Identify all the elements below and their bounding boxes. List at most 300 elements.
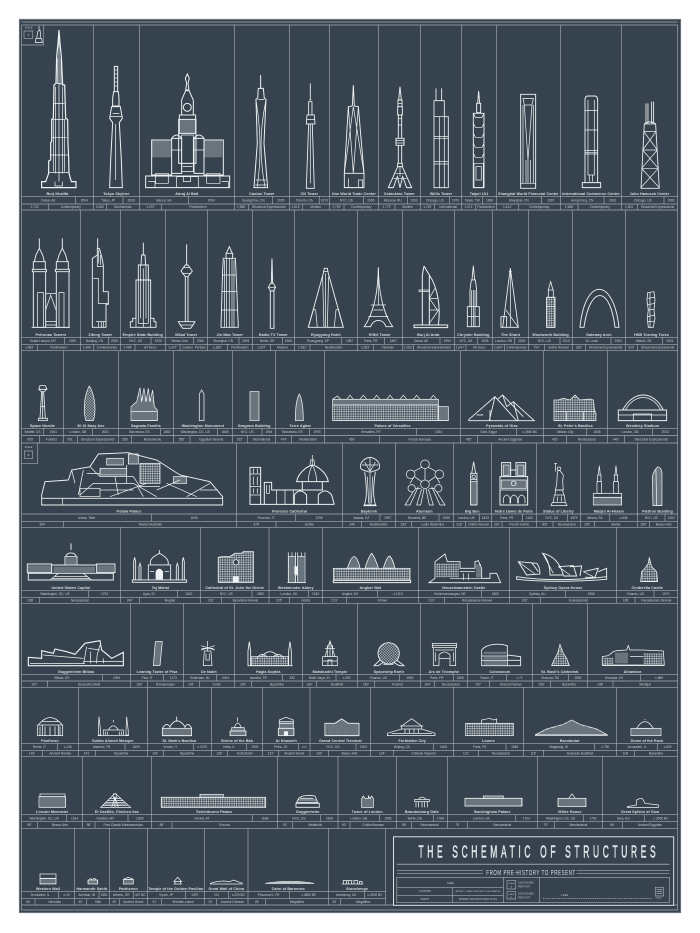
- structure: Temple of the Golden Pavilion: 1397: [191, 893, 199, 897]
- structure: Guggenheim Bilbao: 1993: [113, 676, 120, 680]
- structure: Milad Tower: Contem. Persian: [182, 346, 206, 350]
- structure: Great Sphinx of Giza: Giza, EG: [617, 816, 630, 820]
- structure: Petronas Towers: 1,483': [25, 346, 34, 350]
- icon: Parthenon: [123, 877, 133, 884]
- structure: Angkor Wat: Khmer: [378, 598, 388, 602]
- structure: El Castillo, Chichen Itza: Yucatan, MX: [96, 816, 115, 820]
- structure: Spaceship Earth: 180': [363, 682, 369, 686]
- structure: Eiffel Tower: 1887: [390, 339, 397, 343]
- structure: Brandenburg Gate: Neoclassical: [421, 823, 439, 827]
- structure: Chrysler Building: Chrysler Building: [457, 333, 490, 337]
- structure: Brandenburg Gate: 85': [402, 823, 406, 827]
- icon: Chrysler Building: [467, 266, 479, 327]
- structure: Westminster Abbey: 1245: [312, 592, 319, 596]
- structure: Big Ben: 316': [457, 522, 463, 526]
- structure: White House: Washington, DC, US: [546, 816, 575, 820]
- structure: White House: Neoclassical: [569, 823, 588, 827]
- structure: Buckingham Palace: 79': [455, 823, 460, 827]
- structure: Masjid Al-Haram: Masjid Al-Haram: [594, 510, 624, 514]
- structure: El Castillo, Chichen Itza: [87, 793, 144, 827]
- structure: Gateway Arch: Gateway Arch: [586, 333, 612, 337]
- structure: Grand Central Terminal: [316, 719, 367, 756]
- icon: Taipei 101: [473, 91, 484, 188]
- structure: Arc de Triomphe: Arc de Triomphe: [429, 670, 459, 674]
- structure: Parthenon: Ancient Greek: [123, 900, 144, 904]
- structure: St. Basil's Cathedral: [539, 644, 582, 686]
- structure: Borobudur: [530, 720, 609, 756]
- structure: Radio TV Tower: 1965: [285, 339, 292, 343]
- structure: Notre Dame de Paris: French Gothic: [509, 522, 530, 526]
- structure: Potala Palace: Potala Palace: [117, 510, 141, 514]
- icon: Alhambra: [602, 646, 664, 666]
- structure: Alhambra: Alhambra: [624, 670, 642, 674]
- structure: Florence Cathedral: Florence Cathedral: [272, 510, 307, 514]
- icon: Big Ben: [471, 462, 477, 505]
- structure: Arc de Triomphe: [424, 643, 464, 686]
- icon: Louvre: [466, 718, 513, 736]
- structure: Abraj Al Bait: [146, 74, 230, 209]
- structure: Guggenheim: NYC, US: [293, 816, 305, 820]
- structure: Buckingham Palace: [455, 796, 530, 827]
- icon: Guggenheim: [296, 795, 319, 807]
- structure: International Commerce Centre: Hong Kong, CN: [571, 198, 594, 202]
- structure: Zifeng Tower: 1,480': [83, 346, 92, 350]
- icon: Mahabodhi Temple: [323, 641, 337, 666]
- structure: Temple of the Golden Pavilion: Kyoto, JP: [159, 893, 173, 897]
- legend: SCALE: [508, 893, 515, 896]
- structure: Sultan Ahmed Mosque: 141': [84, 752, 90, 756]
- row 3: [24, 386, 669, 441]
- icon: Al Khazneh: [278, 717, 294, 736]
- structure: Tower of London: Gothic/Norman: [362, 823, 384, 827]
- structure: Dome of the Rock: Jerusalem, IL: [627, 745, 647, 749]
- structure: Colosseum: c.72: [516, 676, 523, 680]
- structure: Temple of the Golden Pavilion: Shinden-zukuri: [172, 900, 194, 904]
- structure: Atomium: Ludic Modernist: [421, 522, 444, 526]
- structure: Woolworth Building: [532, 282, 570, 350]
- structure: Shanghai World Financial Center: [498, 94, 559, 209]
- structure: Lincoln Memorial: 1914: [71, 816, 78, 820]
- structure: International Commerce Centre: 2002: [609, 198, 616, 202]
- structure: Flatiron Building: NYC, US: [645, 516, 658, 520]
- structure: Shrine of the Báb: [216, 717, 258, 756]
- structure: Chrysler Building: 1928: [481, 339, 489, 343]
- structure: El Castillo, Chichen Itza: 98': [87, 823, 91, 827]
- structure: St. Peter's Basilica: Vatican City: [557, 430, 574, 434]
- icon: Temple of the Golden Pavilion: [174, 877, 182, 884]
- structure: Burj Khalifa: 2,722': [31, 205, 40, 209]
- icon: Neuschwanstein Castle: [429, 554, 501, 583]
- structure: Louvre: Louvre: [482, 739, 495, 743]
- structure: Chrysler Building: Art Deco: [473, 346, 486, 350]
- structure: Torre Agbar: 1999: [313, 430, 321, 434]
- structure: Zifeng Tower: [83, 238, 118, 350]
- structure: St. Peter's Basilica: 452': [552, 437, 558, 441]
- structure: Westminster Abbey: 225': [276, 598, 283, 602]
- structure: Great Wall of China: Ancient Chinese: [221, 900, 244, 904]
- structure: One World Trade Center: One World Trade Center: [332, 192, 376, 196]
- structure: Parthenon: Athens, GR: [113, 893, 130, 897]
- structure: Washington Monument: [179, 390, 229, 441]
- structure: Mahabodhi Temple: Buddhist: [331, 682, 343, 686]
- structure: Neuschwanstein Castle: 213': [429, 598, 435, 602]
- icon: St. Peter's Basilica: [554, 395, 596, 421]
- structure: Borobudur: Magelang, ID: [549, 745, 569, 749]
- structure: Grand Central Terminal: Beaux-Arts: [342, 752, 358, 756]
- structure: Western Wall: [26, 874, 70, 904]
- structure: Radio TV Tower: Modern: [277, 346, 288, 350]
- structure: Forbidden City: Forbidden City: [399, 739, 427, 743]
- structure: Cinderella Castle: Renaissance Revival: [641, 598, 671, 602]
- structure: Masjid Al-Haram: 292': [584, 522, 591, 526]
- icon: Schönbrunn Palace: [161, 794, 266, 807]
- structure: Mahabodhi Temple: [307, 641, 351, 686]
- structure: Eiffel Tower: Paris, FR: [364, 339, 378, 343]
- structure: Radio TV Tower: Berlin, DE: [260, 339, 274, 343]
- structure: The Shard: The Shard: [501, 333, 521, 337]
- structure: United States Capitol: Washington, DC, US: [40, 592, 70, 596]
- structure: Statue of Liberty: 1875: [570, 516, 578, 520]
- structure: Hagia Sophia: 180': [240, 682, 246, 686]
- structure: Ryugyong Hotel: Neofuturistic: [325, 346, 343, 350]
- row 2: [25, 238, 674, 350]
- structure: Atomium: Atomium: [416, 510, 433, 514]
- icon: Tokyo Skytree: [110, 66, 122, 188]
- structure: Cairn of Barnenez: [255, 881, 317, 904]
- structure: St. Mark's Basilica: St. Mark's Basilica: [162, 739, 197, 743]
- structure: Harmandir Sahib: [76, 878, 108, 904]
- structure: Cathedral of St. John the Divine: Byzantine Revival: [233, 598, 258, 602]
- structure: Brandenburg Gate: [402, 797, 444, 827]
- structure: Tokyo Skytree: Tokyo, JP: [101, 198, 115, 202]
- structure: Palace of Versailles: French Baroque: [408, 437, 431, 441]
- structure: Potala Palace: 1645: [190, 516, 198, 520]
- structure: Forbidden City: [379, 719, 447, 756]
- structure: 30 St Mary Axe: London, GB: [69, 430, 86, 434]
- structure: Sultan Ahmed Mosque: Istanbul, TR: [93, 745, 111, 749]
- structure: Colosseum: Ancient Roman: [500, 682, 522, 686]
- structure: Colosseum: Colosseum: [489, 670, 511, 674]
- structure: One World Trade Center: Contemporary: [351, 205, 372, 209]
- structure: Zifeng Tower: 2005: [111, 339, 118, 343]
- structure: Schönbrunn Palace: Vienna, AT: [194, 816, 209, 820]
- structure: Masjid Al-Haram: c.638: [620, 516, 628, 520]
- structure: Taipei 101: Taipei, TW: [465, 198, 480, 202]
- icon: Potala Palace: [42, 453, 223, 505]
- structure: Ryugyong Hotel: Ryugyong Hotel: [311, 333, 341, 337]
- structure: Sydney Opera House: Sydney, AU: [529, 592, 546, 596]
- structure: Great Sphinx of Giza: c.2500 BC: [654, 816, 669, 820]
- structure: Seagram Building: 515': [237, 437, 243, 441]
- legend: 1 MILE: [561, 894, 569, 897]
- structure: Taj Mahal: Agra, IN: [143, 592, 155, 596]
- structure: Sydney Opera House: Sydney Opera House: [544, 586, 582, 590]
- structure: Alhambra: Mudéjar: [640, 682, 652, 686]
- legend: [397, 877, 669, 903]
- structure: Ostankino Tower: 1963: [410, 198, 418, 202]
- icon: Ostankino Tower: [388, 87, 412, 188]
- structure: Potala Palace: 384': [39, 522, 46, 526]
- icon: Palace of Versailles: [333, 395, 448, 421]
- structure: Guggenheim: Metabolic: [308, 823, 323, 827]
- structure: St. Basil's Cathedral: 1555: [574, 676, 582, 680]
- structure: Willis Tower: 1,729': [423, 205, 432, 209]
- structure: Zifeng Tower: Zifeng Tower: [88, 333, 113, 337]
- structure: De Nolet: Schiedam, NL: [190, 676, 210, 680]
- structure: Borobudur: Borobudur: [560, 739, 580, 743]
- structure: Washington Monument: 555': [179, 437, 185, 441]
- structure: One World Trade Center: 1,792': [332, 205, 341, 209]
- structure: Big Ben: 1843: [482, 516, 489, 520]
- structure: Palace of Versailles: [333, 395, 448, 441]
- structure: Notre Dame de Paris: Paris, FR: [500, 516, 514, 520]
- scale box A: SCALE: [25, 27, 33, 30]
- structure: Colosseum: 157': [475, 682, 482, 686]
- structure: St. Basil's Cathedral: Moscow, RU: [541, 676, 560, 680]
- structure: Canton Tower: Canton Tower: [249, 192, 275, 196]
- structure: Al Khazneh: Al Khazneh: [276, 739, 297, 743]
- structure: Westminster Abbey: Gothic: [301, 598, 311, 602]
- structure: Statue of Liberty: [542, 463, 578, 526]
- legend: HEIGHT: [421, 899, 430, 901]
- structure: Woolworth Building: 792': [534, 346, 540, 350]
- structure: Louvre: Neoclassical: [492, 752, 510, 756]
- row 6: [28, 641, 664, 686]
- structure: Eiffel Tower: Eiffel Tower: [369, 333, 391, 337]
- structure: Parthenon: Parthenon: [119, 887, 138, 891]
- structure: Masjid Al-Haram: Islamic: [611, 522, 621, 526]
- subtitle: FROM PRE-HISTORY TO PRESENT: [486, 869, 575, 877]
- structure: Dome of the Rock: Dome of the Rock: [631, 739, 664, 743]
- icon: Ryugyong Hotel: [308, 268, 343, 327]
- structure: Dome of the Rock: 118': [622, 752, 629, 756]
- structure: Pyramids of Giza: [466, 395, 538, 441]
- structure: Florence Cathedral: 376': [253, 522, 260, 526]
- structure: Lincoln Memorial: Lincoln Memorial: [36, 810, 68, 814]
- structure: Ryugyong Hotel: Pyongyang, KP: [307, 339, 329, 343]
- structure: CN Tower: 1973: [321, 198, 328, 202]
- structure: Florence Cathedral: Gothic: [305, 522, 314, 526]
- structure: St. Peter's Basilica: Renaissance: [578, 437, 596, 441]
- structure: Cathedral of St. John the Divine: [205, 552, 264, 602]
- icon: International Commerce Centre: [582, 96, 601, 188]
- structure: Alhambra: [597, 646, 664, 686]
- structure: Ryugyong Hotel: 1987: [346, 339, 353, 343]
- icon: Atomium: [405, 460, 445, 505]
- structure: Woolworth Building: 1910: [563, 339, 570, 343]
- structure: Abraj Al Bait: 2004: [208, 198, 215, 202]
- icon: Jin Mao Tower: [221, 247, 238, 327]
- structure: Potala Palace: [39, 453, 223, 526]
- structure: Pantheon: c.126: [64, 745, 72, 749]
- structure: Washington Monument: Washington, DC, US: [181, 430, 210, 434]
- structure: Temple of the Golden Pavilion: 41': [152, 900, 157, 904]
- structure: Hagia Sophia: 532: [290, 676, 295, 680]
- structure: 30 St Mary Axe: 591': [67, 437, 74, 441]
- structure: Torre Agbar: Barcelona, ES: [282, 430, 303, 434]
- structure: Cinderella Castle: 1970: [662, 592, 670, 596]
- row 1: [31, 30, 675, 209]
- structure: Leaning Tower of Pisa: [136, 642, 178, 686]
- structure: Buckingham Palace: 1703: [523, 816, 530, 820]
- structure: Stonehenge: 25': [332, 900, 337, 904]
- icon: Seagram Building: [250, 392, 259, 421]
- structure: Big Ben: [457, 462, 489, 526]
- structure: Florence Cathedral: Florence, IT: [257, 516, 275, 520]
- structure: Taipei 101: Postmodern: [477, 205, 495, 209]
- structure: Angkor Wat: c.1113: [393, 592, 403, 596]
- structure: Louvre: 1546: [511, 745, 518, 749]
- structure: Grand Central Terminal: NYC, US: [327, 745, 339, 749]
- icon: United States Capitol: [27, 543, 115, 580]
- structure: Potala Palace: Lhasa, Tibet: [78, 516, 95, 520]
- structure: Space Needle: [24, 386, 57, 441]
- icon: Shrine of the Báb: [230, 717, 246, 736]
- icon: Wembley Stadium: [618, 395, 667, 421]
- structure: Leaning Tower of Pisa: Romanesque: [156, 682, 175, 686]
- icon: Buckingham Palace: [465, 796, 522, 806]
- structure: Stonehenge: [332, 881, 383, 904]
- structure: Guggenheim: 1956: [326, 816, 333, 820]
- structure: The Shard: London, GB: [495, 339, 512, 343]
- icon: 30 St Mary Axe: [84, 386, 95, 421]
- structure: Spaceship Earth: Spaceship Earth: [374, 670, 405, 674]
- structure: Milad Tower: Milad Tower: [175, 333, 198, 337]
- structure: Empire State Building: 1,454': [123, 346, 132, 350]
- structure: Seagram Building: [237, 392, 273, 441]
- structure: Pantheon: Ancient Roman: [49, 752, 71, 756]
- structure: Notre Dame de Paris: 1163: [526, 516, 533, 520]
- structure: One World Trade Center: NYC, US: [340, 198, 353, 202]
- structure: Colosseum: Rome, IT: [480, 676, 494, 680]
- icon: Torre Agbar: [295, 394, 303, 421]
- structure: Washington Monument: Egyptian Revival: [199, 437, 223, 441]
- structure: Great Wall of China: Great Wall of China: [208, 887, 245, 891]
- structure: Sagrada Familia: 1882: [163, 430, 171, 434]
- structure: CN Tower: CN Tower: [300, 192, 319, 196]
- structure: Leaning Tower of Pisa: Pisa, IT: [142, 676, 152, 680]
- structure: The Shard: 2009: [518, 339, 525, 343]
- structure: Bayterek: Astana, KZ: [353, 516, 369, 520]
- structure: Ostankino Tower: Moscow, RU: [384, 198, 402, 202]
- structure: CN Tower: Toronto, CA: [296, 198, 314, 202]
- structure: Zifeng Tower: Contemporary: [97, 346, 118, 350]
- icon: Sydney Opera House: [517, 553, 607, 581]
- structure: Seagram Building: NYC, US: [241, 430, 254, 434]
- structure: Gateway Arch: St. Louis: [585, 339, 598, 343]
- structure: Palace of Versailles: 1624: [435, 430, 442, 434]
- structure: Shrine of the Báb: Haifa, IL: [223, 745, 235, 749]
- structure: United States Capitol: [27, 543, 115, 602]
- structure: Jin Mao Tower: [213, 247, 249, 350]
- structure: Jin Mao Tower: Postmodern: [231, 346, 249, 350]
- structure: Forbidden City: Chinese Imperial: [412, 752, 436, 756]
- icon: St. Basil's Cathedral: [552, 644, 569, 666]
- structure: White House: [544, 794, 597, 827]
- structure: Jin Mao Tower: Shanghai, CN: [213, 339, 234, 343]
- structure: Leaning Tower of Pisa: Leaning Tower of Pisa: [137, 670, 178, 674]
- structure: Seagram Building: Seagram Building: [238, 424, 271, 428]
- structure: Woolworth Building: Woolworth Building: [532, 333, 569, 337]
- structure: Harmandir Sahib: Amritsar, IN: [78, 893, 96, 897]
- structure: Bayterek: Bayterek: [361, 510, 378, 514]
- structure: Sydney Opera House: 210': [522, 598, 528, 602]
- structure: Western Wall: Western Wall: [36, 887, 60, 891]
- structure: Atomium: 1955: [443, 516, 450, 520]
- structure: Guggenheim Bilbao: Deconstructivist: [78, 682, 100, 686]
- structure: Great Sphinx of Giza: Ancient Egyptian: [638, 823, 662, 827]
- structure: St. Basil's Cathedral: St. Basil's Cathedral: [541, 670, 578, 674]
- structure: Petronas Towers: Postmodern: [50, 346, 68, 350]
- structure: HSB Turning Torso: 623': [628, 346, 635, 350]
- structure: International Commerce Centre: Contemporary: [590, 205, 610, 209]
- icon: Leaning Tower of Pisa: [153, 642, 162, 666]
- structure: Guggenheim Bilbao: Bilbao, ES: [54, 676, 69, 680]
- icon: White House: [558, 794, 586, 807]
- structure: Space Needle: Seattle, US: [24, 430, 40, 434]
- icon: Burj Khalifa: [42, 30, 76, 188]
- structure: Chrysler Building: 1,047': [456, 346, 465, 350]
- structure: Lincoln Memorial: [27, 794, 78, 827]
- structure: Statue of Liberty: Statue of Liberty: [543, 510, 574, 514]
- structure: Ostankino Tower: Ostankino Tower: [384, 192, 415, 196]
- structure: Borobudur: 115': [530, 752, 537, 756]
- structure: Great Wall of China: [208, 880, 246, 904]
- structure: Louvre: Paris, FR: [473, 745, 487, 749]
- structure: Angkor Wat: Angkor Wat: [360, 586, 382, 590]
- structure: Wembley Stadium: Wembley Stadium: [626, 424, 660, 428]
- structure: Jin Mao Tower: 1,380': [213, 346, 222, 350]
- structure: Palace of Versailles: Palace of Versailles: [374, 424, 411, 428]
- structure: Milad Tower: 1,427': [168, 346, 177, 350]
- structure: Ostankino Tower: Modern: [402, 205, 413, 209]
- structure: Al Khazneh: 131': [268, 752, 274, 756]
- icon: Statue of Liberty: [551, 463, 567, 506]
- structure: Radio TV Tower: 1,207': [257, 346, 266, 350]
- icon: Cairn of Barnenez: [265, 881, 314, 883]
- structure: One World Trade Center: [332, 85, 376, 209]
- structure: Spaceship Earth: Futurist: [392, 682, 403, 686]
- icon: compass plate: [655, 887, 664, 899]
- structure: Atomium: [401, 460, 450, 526]
- structure: St. Basil's Cathedral: Byzantine: [562, 682, 576, 686]
- icon: One World Trade Center: [344, 85, 364, 188]
- structure: Canton Tower: 1,988': [237, 205, 246, 209]
- structure: Arc de Triomphe: 164': [424, 682, 431, 686]
- structure: Pantheon: Pantheon: [41, 739, 59, 743]
- structure: Notre Dame de Paris: [494, 463, 533, 526]
- structure: Sultan Ahmed Mosque: Byzantine: [114, 752, 129, 756]
- structure: St. Mark's Basilica: Venice, IT: [163, 745, 177, 749]
- structure: Hagia Sophia: Hagia Sophia: [256, 670, 281, 674]
- title block: [394, 837, 674, 905]
- structure: Ryugyong Hotel: [298, 268, 353, 350]
- structure: Taipei 101: 1999: [486, 198, 493, 202]
- structure: Torre Agbar: Modernisme: [299, 437, 317, 441]
- structure: Schönbrunn Palace: 1638: [261, 816, 269, 820]
- structure: Statue of Liberty: Neoclassical: [558, 522, 576, 526]
- structure: Neuschwanstein Castle: [429, 554, 501, 602]
- icon: Cinderella Castle: [641, 557, 658, 582]
- structure: Empire State Building: Art Deco: [144, 346, 157, 350]
- legend: PRIMARY ARCHITECTURAL STYLE: [459, 898, 497, 901]
- structure: The Shard: [494, 268, 527, 350]
- structure: Cathedral of St. John the Divine: Cathedral of St. John the Divine: [205, 586, 264, 590]
- row 5: [27, 543, 671, 602]
- structure: Al Khazneh: Petra, JO: [274, 745, 288, 749]
- icon: Empire State Building: [130, 243, 156, 327]
- structure: Big Ben: London, UK: [458, 516, 476, 520]
